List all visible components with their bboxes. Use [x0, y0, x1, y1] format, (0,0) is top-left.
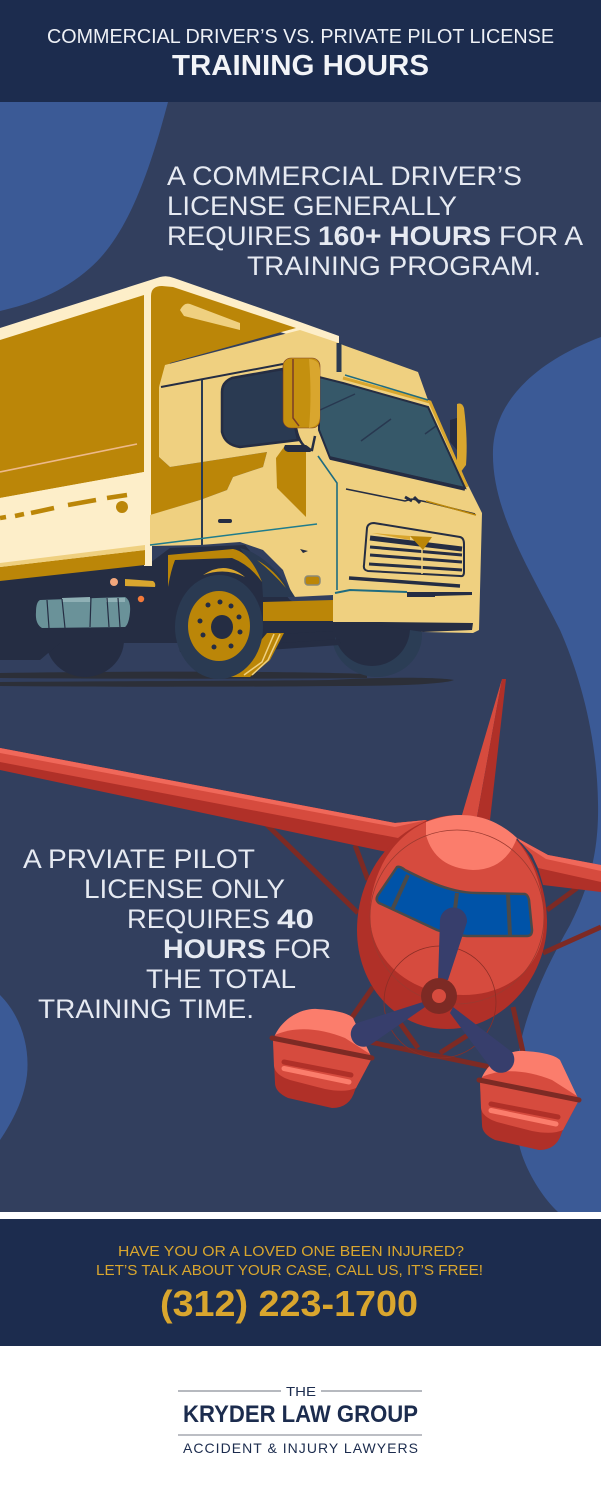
header band	[0, 0, 601, 102]
cab	[150, 330, 482, 633]
header subtitle: COMMERCIAL DRIVER’S VS. PRIVATE PILOT LICENSE	[47, 26, 554, 48]
text block: private pilot license: REQUIRES	[127, 904, 270, 934]
text block: commercial driver's license: LICENSE GENERALLY	[167, 191, 457, 221]
text block: private pilot license: 40	[277, 904, 314, 934]
cab trim lines	[161, 364, 283, 387]
box body	[0, 276, 339, 581]
text block: commercial driver's license	[167, 161, 583, 281]
text block: private pilot license: LICENSE ONLY	[84, 874, 285, 904]
propeller	[351, 907, 514, 1073]
tail fin	[462, 679, 506, 820]
logo	[178, 1384, 422, 1456]
call to action band	[0, 1219, 601, 1346]
text block: private pilot license: TRAINING TIME.	[38, 994, 254, 1024]
logo: KRYDER LAW GROUP	[183, 1401, 418, 1428]
left float	[272, 1009, 372, 1108]
phone number: (312) 223-1700	[160, 1283, 418, 1324]
left wing	[0, 748, 427, 855]
logo: ACCIDENT & INJURY LAWYERS	[183, 1440, 418, 1456]
side window	[222, 369, 298, 447]
bumper details	[263, 578, 473, 635]
right wing underside	[538, 868, 601, 892]
illustration: truck	[0, 276, 482, 687]
cockpit window	[377, 867, 532, 936]
text block: private pilot license: A PRVIATE PILOT	[23, 844, 255, 874]
axle bar	[268, 642, 340, 647]
text block: private pilot license: FOR	[274, 934, 331, 964]
windshield	[319, 375, 467, 489]
text block: commercial driver's license: FOR A	[499, 221, 583, 251]
mirror left	[283, 358, 320, 452]
text block: private pilot license: HOURS	[163, 934, 266, 964]
exhaust tank	[36, 597, 130, 628]
lights	[110, 578, 155, 602]
header title: TRAINING HOURS	[172, 50, 429, 82]
call to action text: LET’S TALK ABOUT YOUR CASE, CALL US, IT’S FREE!	[96, 1262, 483, 1279]
mirror right	[450, 404, 467, 473]
text block: commercial driver's license: TRAINING PROGRAM.	[247, 251, 541, 281]
call to action text: HAVE YOU OR A LOVED ONE BEEN INJURED?	[118, 1243, 464, 1260]
ground shadow	[0, 672, 454, 687]
fuselage	[357, 815, 547, 1058]
chassis	[0, 545, 335, 660]
grille	[364, 523, 464, 576]
struts	[265, 823, 601, 1067]
right wing	[517, 838, 601, 882]
logo: THE	[286, 1384, 316, 1399]
illustration: plane	[0, 679, 601, 1150]
text block: private pilot license: THE TOTAL	[146, 964, 296, 994]
text block: commercial driver's license: REQUIRES	[167, 221, 311, 251]
front wheel	[175, 575, 263, 679]
rear wheel	[46, 603, 124, 677]
right float	[479, 1051, 579, 1150]
text block: commercial driver's license: A COMMERCIAL DRIVER’S	[167, 161, 522, 191]
fender	[168, 548, 295, 597]
hood trim	[346, 489, 475, 514]
call to action text	[96, 1243, 483, 1279]
text block: commercial driver's license: 160+ HOURS	[318, 221, 491, 251]
front right wheel	[332, 593, 422, 677]
text block: private pilot license	[23, 844, 331, 1024]
front wheel tread	[230, 633, 284, 677]
